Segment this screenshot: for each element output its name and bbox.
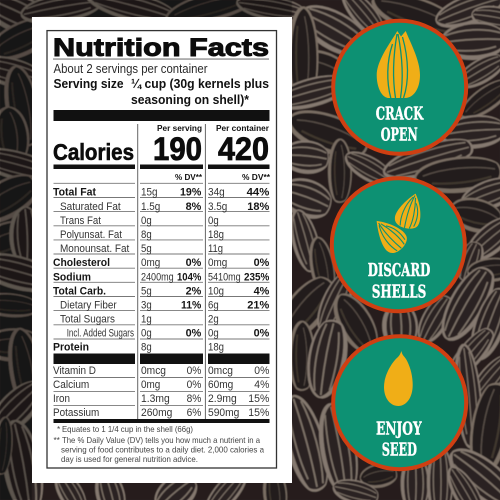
servings information: Serving size [54, 76, 124, 91]
column dividers [138, 124, 205, 419]
label: enjoy seed: ENJOY [376, 418, 422, 439]
nutrient table: 0g [141, 215, 152, 227]
nutrient table: 18g [208, 342, 224, 354]
servings information: About 2 servings per container [54, 61, 208, 76]
calories block: % DV** [175, 173, 203, 182]
panel: nutrition facts card [32, 17, 292, 483]
servings information: ¼ cup (30g kernels plus [131, 76, 269, 91]
nutrient table: Sodium [53, 271, 91, 283]
nutrient table: 0% [254, 328, 270, 340]
nutrient table: 0% [186, 257, 202, 269]
nutrient table: 1g [141, 314, 152, 326]
vitamins and minerals table: 60mg [208, 379, 233, 391]
footnotes: day is used for general nutrition advice. [61, 455, 198, 464]
nutrient table: 8g [141, 229, 152, 241]
nutrient table: 15g [141, 187, 158, 199]
nutrient table: 4% [254, 285, 270, 297]
footnotes: ** [54, 436, 61, 445]
label: discard shells [368, 260, 430, 303]
nutrient table: 3.5g [208, 201, 227, 213]
nutrient table: Polyunsat. Fat [60, 229, 122, 241]
label: discard shells: DISCARD [368, 260, 430, 281]
footnotes [54, 425, 264, 464]
nutrient table: 2g [208, 314, 219, 326]
vitamins and minerals table: 15% [248, 393, 269, 405]
panel: enjoy seed badge [333, 336, 466, 469]
label: discard shells: SHELLS [372, 282, 426, 303]
calories block [53, 123, 271, 182]
nutrient table: 0mg [208, 257, 227, 269]
vitamins and minerals table: 1.3mg [141, 393, 170, 405]
calories block: Per container [216, 123, 270, 133]
nutrient table: Total Sugars [60, 314, 115, 326]
vitamins and minerals table: 6% [187, 407, 201, 419]
calories block: 190 [153, 131, 202, 167]
vitamins and minerals table: 0mcg [141, 365, 166, 377]
calories block: Per serving [157, 123, 202, 133]
vitamins and minerals table: 0% [187, 379, 201, 391]
nutrient table: 44% [247, 187, 270, 199]
nutrient table: Total Carb. [53, 285, 106, 297]
nutrient table: Cholesterol [53, 257, 110, 269]
nutrient table: 21% [247, 300, 270, 312]
nutrient table: 19% [180, 187, 201, 199]
servings information [54, 61, 269, 107]
label: crack open: CRACK [376, 104, 424, 124]
nutrient table: 0% [186, 328, 202, 340]
nutrient table: 3g [141, 300, 152, 312]
vitamins and minerals table: Iron [53, 393, 70, 405]
nutrient table: 2400mg [141, 271, 174, 283]
nutrient table: 0g [208, 215, 219, 227]
nutrient table: 11% [181, 300, 201, 312]
calories block: 420 [218, 131, 269, 167]
vitamins and minerals table: 590mg [208, 407, 239, 419]
nutrient table: Incl. Added Sugars [67, 328, 134, 340]
nutrient table: Saturated Fat [60, 201, 121, 213]
footnotes: * [57, 425, 61, 434]
nutrient table: 8g [141, 342, 152, 354]
vitamins and minerals table [53, 365, 269, 419]
black separator bars [54, 354, 270, 364]
nutrient table: Dietary Fiber [60, 300, 117, 312]
nutrient table: 10g [208, 285, 224, 297]
label: crack open: OPEN [381, 125, 418, 146]
row divider lines [54, 183, 270, 406]
nutrient table: 0% [254, 257, 270, 269]
calories block: Calories [53, 139, 134, 165]
vitamins and minerals table: Vitamin D [53, 365, 96, 377]
nutrient table: 5410mg [208, 271, 241, 283]
bottom black bar [54, 419, 270, 423]
vitamins and minerals table: Calcium [53, 379, 89, 391]
panel: discard shells badge [332, 178, 465, 311]
calories block: % DV** [242, 173, 271, 182]
nutrient table: Total Fat [53, 187, 96, 199]
vitamins and minerals table: 0mg [141, 379, 160, 391]
vitamins and minerals table: 0mcg [208, 365, 233, 377]
nutrient table: 2% [186, 285, 202, 297]
nutrient table: 104% [177, 271, 201, 283]
vitamins and minerals table: 0% [254, 365, 269, 377]
nutrient table: Trans Fat [60, 215, 101, 227]
panel: crack open badge [333, 21, 466, 154]
nutrient table: 5g [141, 285, 152, 297]
thick black bar [54, 110, 270, 121]
vitamins and minerals table: 15% [248, 407, 269, 419]
footnotes: Equates to 1 1/4 cup in the shell (66g) [62, 425, 193, 434]
nutrient table: 18% [247, 201, 270, 213]
nutrient table: 5g [141, 243, 152, 255]
vitamins and minerals table: 2.9mg [208, 393, 237, 405]
nutrient table: 18g [208, 229, 224, 241]
nutrient table: 235% [244, 271, 269, 283]
nutrient table: 34g [208, 187, 225, 199]
icon: kernel [384, 351, 413, 406]
footnotes: serving of food contributes to a daily diet. 2,000 calories a [61, 446, 264, 454]
nutrient table: 0g [141, 328, 152, 340]
nutrient table: Protein [53, 342, 89, 354]
footnotes: The % Daily Value (DV) tells you how much a nutrient in a [62, 436, 260, 445]
vitamins and minerals table: 0% [187, 365, 201, 377]
nutrient table: 0mg [141, 257, 160, 269]
title: Nutrition Facts [53, 34, 269, 62]
vitamins and minerals table: 4% [254, 379, 269, 391]
nutrient table: 11g [208, 243, 223, 255]
nutrient table: 6g [208, 300, 219, 312]
nutrient table: 8% [186, 201, 202, 213]
label: enjoy seed [376, 418, 422, 460]
nutrient table [53, 187, 270, 354]
vitamins and minerals table: Potassium [53, 407, 99, 419]
icon: seed shells [367, 190, 427, 257]
vitamins and minerals table: 8% [187, 393, 201, 405]
icon: cracked seed [377, 31, 420, 98]
vitamins and minerals table: 260mg [141, 407, 172, 419]
nutrient table: Monounsat. Fat [60, 243, 129, 255]
nutrient table: 1.5g [141, 201, 160, 213]
servings information: seasoning on shell)* [131, 92, 250, 107]
label: enjoy seed: SEED [382, 439, 417, 460]
nutrient table: 0g [208, 328, 219, 340]
label: crack open [376, 104, 424, 146]
